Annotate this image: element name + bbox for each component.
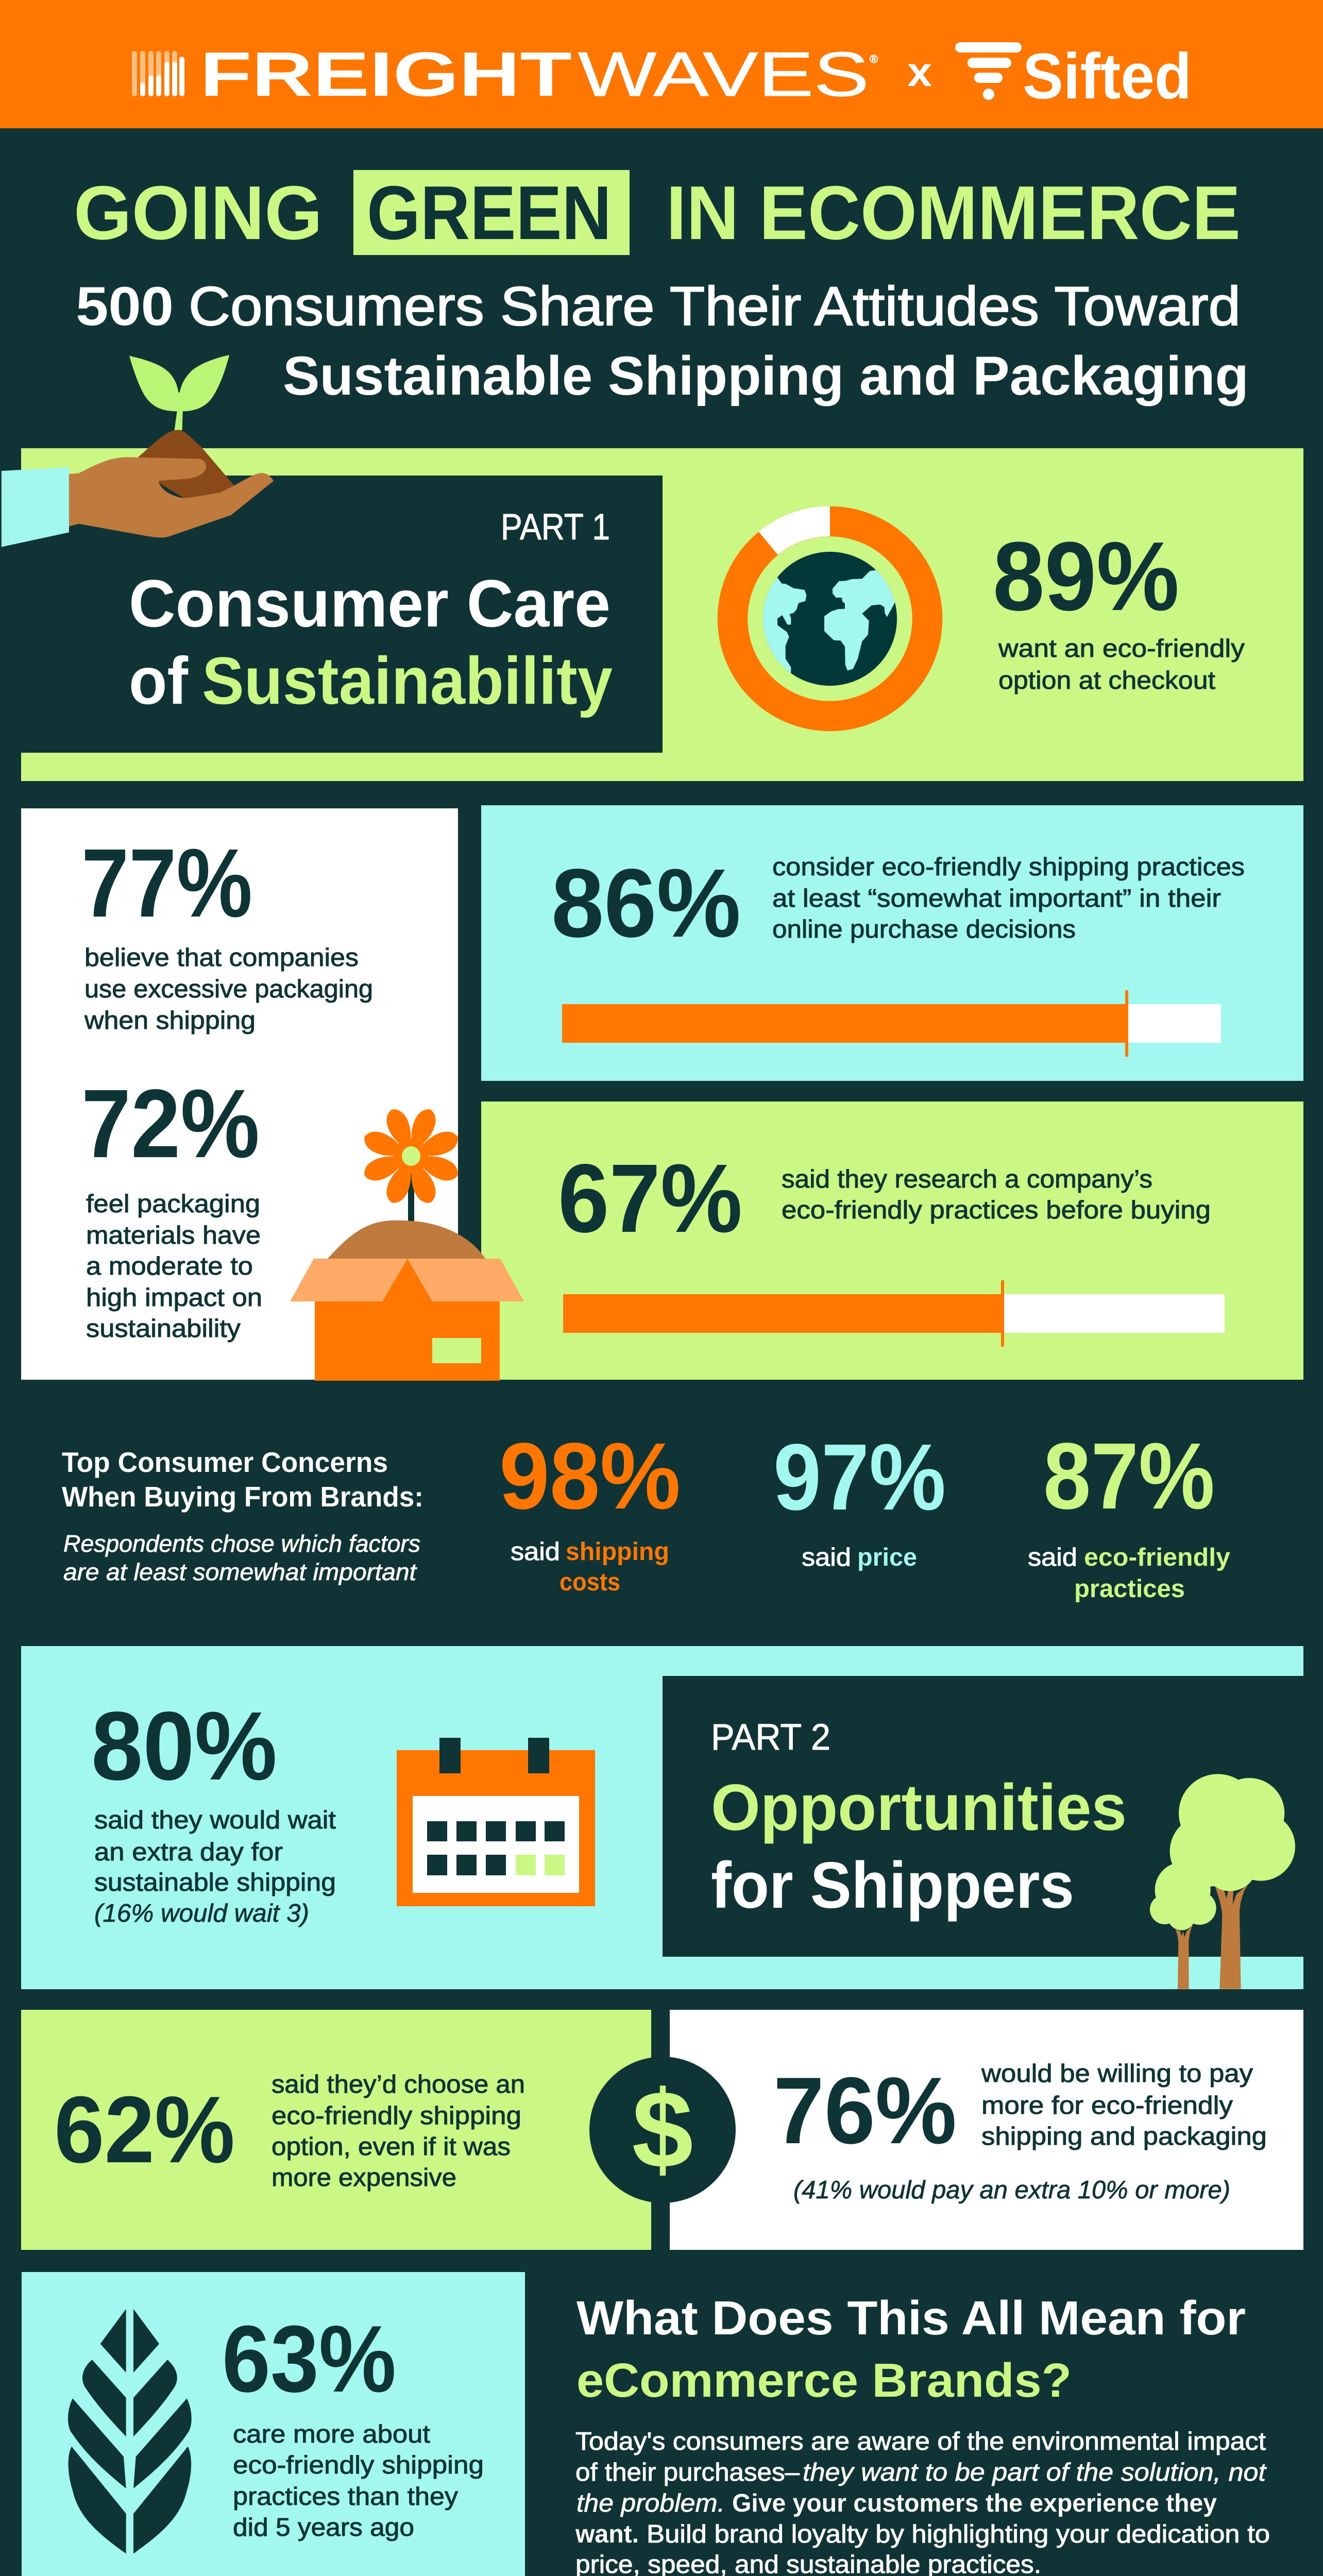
body paragraph [575, 2428, 1270, 2576]
panel: 67 percent: eco-friendly practices before buying [782, 1196, 1211, 1224]
heading box: part 1: Sustainability [202, 643, 613, 718]
stat: 80 percent: sustainable shipping [94, 1869, 336, 1896]
title [74, 170, 1241, 256]
heading box: part 2: Opportunities [711, 1771, 1127, 1844]
panel: 86 percent: consider eco-friendly shipping practices [772, 853, 1245, 881]
stat: 80 percent: said they would wait [94, 1806, 336, 1834]
panel: 62 percent: said they’d choose an [272, 2071, 525, 2098]
logo text: FreightWaves: ® [870, 53, 878, 65]
panel: packaging stats [21, 808, 458, 1380]
subtitle: 500 [76, 275, 174, 337]
panel: 62 percent [21, 2010, 651, 2250]
concerns heading: Top Consumer Concerns [62, 1446, 388, 1478]
stat: 72 percent [81, 1070, 262, 1343]
stat: 72 percent: high impact on [86, 1284, 262, 1312]
heading box: part 2 [663, 1676, 1303, 1957]
stat: 77 percent: when shipping [84, 1007, 256, 1035]
body paragraph: Today's consumers are aware of the environmental impact [575, 2428, 1266, 2455]
panel: 86 percent [481, 805, 1303, 1081]
panel: 62 percent: eco-friendly shipping [272, 2102, 521, 2130]
stat: 72 percent: a moderate to [86, 1252, 253, 1280]
panel: 86 percent: online purchase decisions [772, 916, 1076, 943]
icon: FreightWaves stripes [132, 51, 184, 96]
stat: 63 percent: did 5 years ago [233, 2514, 414, 2541]
icon: trees [1150, 1774, 1295, 1989]
panel: 76 percent: (41% would pay an extra 10% or more) [793, 2176, 1230, 2204]
concerns heading [62, 1446, 423, 1585]
panel: 63 percent [22, 2272, 525, 2576]
stat: 63 percent: eco-friendly shipping [233, 2451, 484, 2479]
stat: 98 percent shipping costs: costs [559, 1568, 620, 1596]
stat: 98 percent shipping costs: said [511, 1538, 560, 1566]
x separator: x [907, 49, 932, 95]
title: IN ECOMMERCE [666, 171, 1241, 256]
icon: globe [754, 552, 903, 686]
heading box: part 2: for Shippers [711, 1849, 1074, 1922]
icon: hand holding seedling [2, 355, 274, 547]
logo text: FreightWaves: FREIGHT [200, 39, 572, 109]
body paragraph: the problem. [576, 2489, 725, 2517]
heading box: part 1: PART 1 [501, 507, 610, 548]
icon: calendar [397, 1738, 595, 1906]
heading box: part 1: Consumer Care [129, 566, 610, 641]
stat: 77 percent [81, 829, 373, 1035]
stat: 72 percent: materials have [86, 1222, 261, 1249]
panel: 67 percent: 67% [558, 1144, 742, 1253]
section: top consumer concerns [62, 1423, 1230, 1603]
progress bar: 86 percent [562, 990, 1221, 1057]
panel: 62 percent: more expensive [272, 2164, 456, 2192]
stat: 72 percent: sustainability [86, 1315, 241, 1343]
body paragraph: Build brand loyalty by highlighting your dedication to [647, 2520, 1270, 2548]
stat: 97 percent price: 97% [773, 1424, 946, 1530]
icon: Sifted funnel [955, 42, 1022, 100]
header band with logos [0, 0, 1323, 128]
concerns heading: Respondents chose which factors [63, 1530, 420, 1557]
body paragraph: they want to be part of the solution, not [803, 2459, 1267, 2486]
heading: What Does This All Mean for [576, 2291, 1246, 2345]
panel: 86 percent: at least “somewhat important” in their [772, 885, 1221, 912]
stat: 80 percent: 80% [91, 1692, 277, 1801]
panel: 76 percent: 76% [773, 2057, 957, 2163]
icon: leaf [68, 2309, 192, 2554]
subtitle: Sustainable Shipping and Packaging [283, 345, 1249, 406]
concerns heading: are at least somewhat important [63, 1558, 417, 1585]
title: GOING [74, 171, 323, 256]
stat: 89 percent: 89% [993, 522, 1179, 631]
body paragraph: of their purchases– [575, 2459, 800, 2486]
stat: 63 percent [222, 2306, 484, 2541]
stat: 87 percent eco-friendly practices [1028, 1423, 1230, 1603]
panel: 76 percent: more for eco-friendly [981, 2092, 1233, 2120]
stat: 87 percent eco-friendly practices: 87% [1043, 1423, 1215, 1529]
body paragraph: Give your customers the experience they [732, 2489, 1217, 2517]
donut chart: 89 percent with globe [733, 506, 927, 716]
stat: 63 percent: care more about [233, 2420, 430, 2448]
stat: 98 percent shipping costs: shipping [566, 1538, 669, 1566]
stat: 98 percent shipping costs [499, 1423, 681, 1596]
icon: dollar coin: $ [632, 2068, 693, 2191]
stat: 72 percent: 72% [81, 1070, 260, 1178]
heading box: part 1 [21, 476, 663, 753]
panel: part 2 opportunities [21, 1646, 1303, 1989]
title: GREEN [367, 171, 612, 256]
panel: 62 percent: option, even if it was [272, 2133, 511, 2161]
stat: 97 percent price [773, 1424, 946, 1571]
logo text: FreightWaves: WAVES [578, 39, 869, 109]
panel: 67 percent: said they research a company’s [782, 1165, 1152, 1193]
subtitle [76, 275, 1249, 406]
stat: 72 percent: feel packaging [86, 1190, 260, 1218]
panel: 76 percent [670, 2010, 1303, 2250]
panel: part 1 consumer care [21, 448, 1303, 781]
heading box: part 2: PART 2 [711, 1717, 830, 1758]
heading [576, 2291, 1246, 2407]
panel: 86 percent: 86% [551, 849, 741, 958]
panel: 76 percent: shipping and packaging [981, 2123, 1267, 2150]
stat: 80 percent: an extra day for [94, 1838, 283, 1866]
stat: 77 percent: believe that companies [84, 944, 359, 972]
icon: dollar coin [589, 2057, 736, 2203]
subtitle: Consumers Share Their Attitudes Toward [189, 275, 1241, 337]
stat: 89 percent: option at checkout [998, 667, 1215, 694]
heading: eCommerce Brands? [576, 2353, 1072, 2407]
concerns heading: When Buying From Brands: [62, 1481, 423, 1513]
panel: 62 percent: 62% [54, 2076, 235, 2182]
stat: 77 percent: 77% [81, 829, 252, 938]
panel: 67 percent [481, 1101, 1303, 1380]
logo text: Sifted: Sifted [1023, 41, 1192, 112]
stat: 98 percent shipping costs: 98% [499, 1423, 681, 1529]
stat: 63 percent: practices than they [233, 2483, 459, 2511]
stat: 80 percent [91, 1692, 336, 1927]
stat: 97 percent price: price [857, 1544, 917, 1571]
text block: what does this mean [575, 2291, 1270, 2576]
stat: 80 percent: (16% would wait 3) [94, 1900, 309, 1927]
stat: 63 percent: 63% [222, 2306, 396, 2412]
stat: 87 percent eco-friendly practices: eco-friendly [1084, 1544, 1230, 1571]
icon: flower growing from box [290, 1106, 524, 1381]
stat: 77 percent: use excessive packaging [84, 975, 373, 1003]
heading box: part 1: of [129, 643, 189, 718]
stat: 87 percent eco-friendly practices: said [1028, 1544, 1077, 1571]
progress bar: 67 percent [563, 1280, 1225, 1347]
body paragraph: want. [575, 2520, 639, 2548]
panel: 76 percent: would be willing to pay [981, 2060, 1253, 2088]
stat: 97 percent price: said [802, 1544, 851, 1571]
logo text: FreightWaves [200, 39, 878, 109]
stat: 89 percent: want an eco-friendly [998, 635, 1245, 663]
stat: 87 percent eco-friendly practices: practices [1074, 1575, 1185, 1603]
stat: 89 percent [993, 522, 1245, 694]
